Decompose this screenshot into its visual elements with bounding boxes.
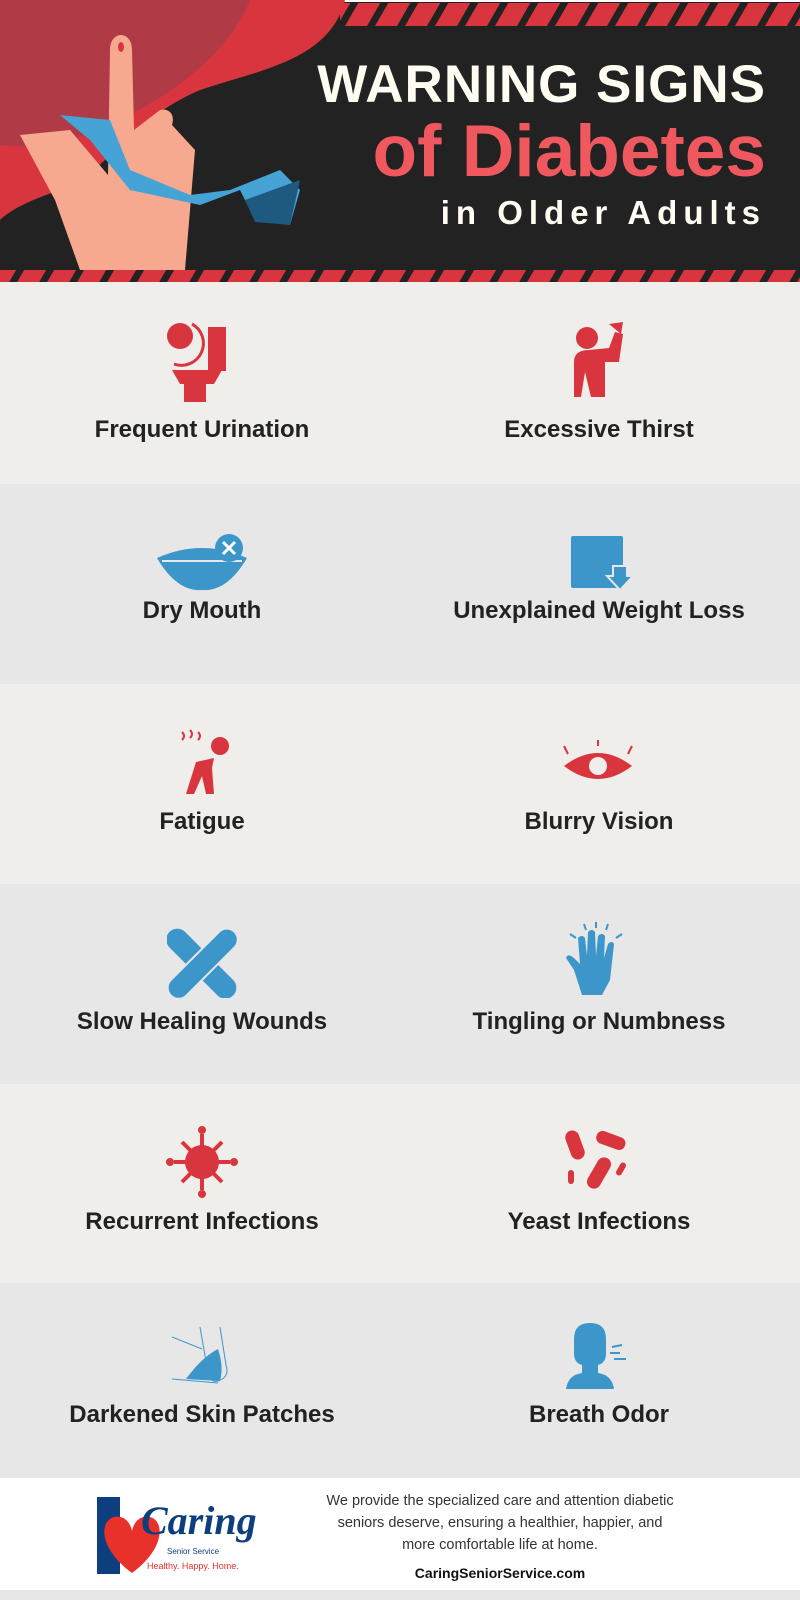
title: in Older Adults: [441, 194, 766, 231]
item: dry mouth: Dry Mouth: [143, 597, 261, 624]
panel row 3: [0, 684, 800, 884]
panel row 5: [0, 1084, 800, 1283]
logo: Caring: [141, 1498, 257, 1543]
panel row 6: [0, 1283, 800, 1478]
logo: [97, 1497, 257, 1574]
title: [317, 55, 766, 231]
item: unexplained weight loss: Unexplained Weight Loss: [453, 597, 745, 624]
item: slow healing wounds: [77, 928, 327, 1035]
item: blurry vision: [525, 740, 673, 835]
item: yeast infections: Yeast Infections: [508, 1208, 690, 1235]
panel row 2: [0, 484, 800, 684]
footer text: We provide the specialized care and attention diabetic seniors deserve, ensuring a healthier, happier, and more comfortable life at home.: [326, 1493, 674, 1553]
item: tingling or numbness: [472, 922, 725, 1035]
item: darkened skin patches: [69, 1327, 335, 1428]
icon: hand with ribbon: [20, 35, 300, 270]
item: yeast infections: [508, 1130, 690, 1235]
item: fatigue: [159, 729, 245, 835]
item: unexplained weight loss: [453, 536, 745, 624]
item: excessive thirst: [504, 322, 694, 443]
panel row 1: [0, 282, 800, 484]
item: tingling or numbness: Tingling or Numbness: [473, 1008, 725, 1035]
website: CaringSeniorService.com: [415, 1565, 585, 1581]
item: blurry vision: Blurry Vision: [525, 808, 673, 835]
logo: Senior Service: [167, 1547, 219, 1556]
item: recurrent infections: [85, 1126, 319, 1235]
footer: [0, 1478, 800, 1590]
item: fatigue: Fatigue: [159, 808, 245, 835]
header: [0, 0, 800, 282]
item: breath odor: Breath Odor: [529, 1401, 669, 1428]
item: darkened skin patches: Darkened Skin Patches: [69, 1401, 335, 1428]
item: frequent urination: Frequent Urination: [95, 416, 309, 443]
item: frequent urination: [95, 322, 309, 443]
title: WARNING SIGNS: [317, 55, 766, 114]
panel row 4: [0, 884, 800, 1084]
item: slow healing wounds: Slow Healing Wounds: [77, 1008, 327, 1035]
item: dry mouth: [143, 534, 261, 624]
item: excessive thirst: Excessive Thirst: [504, 416, 694, 443]
item: recurrent infections: Recurrent Infections: [85, 1208, 319, 1235]
title: of Diabetes: [373, 111, 766, 192]
logo: Healthy. Happy. Home.: [147, 1561, 239, 1571]
item: breath odor: [529, 1323, 669, 1428]
